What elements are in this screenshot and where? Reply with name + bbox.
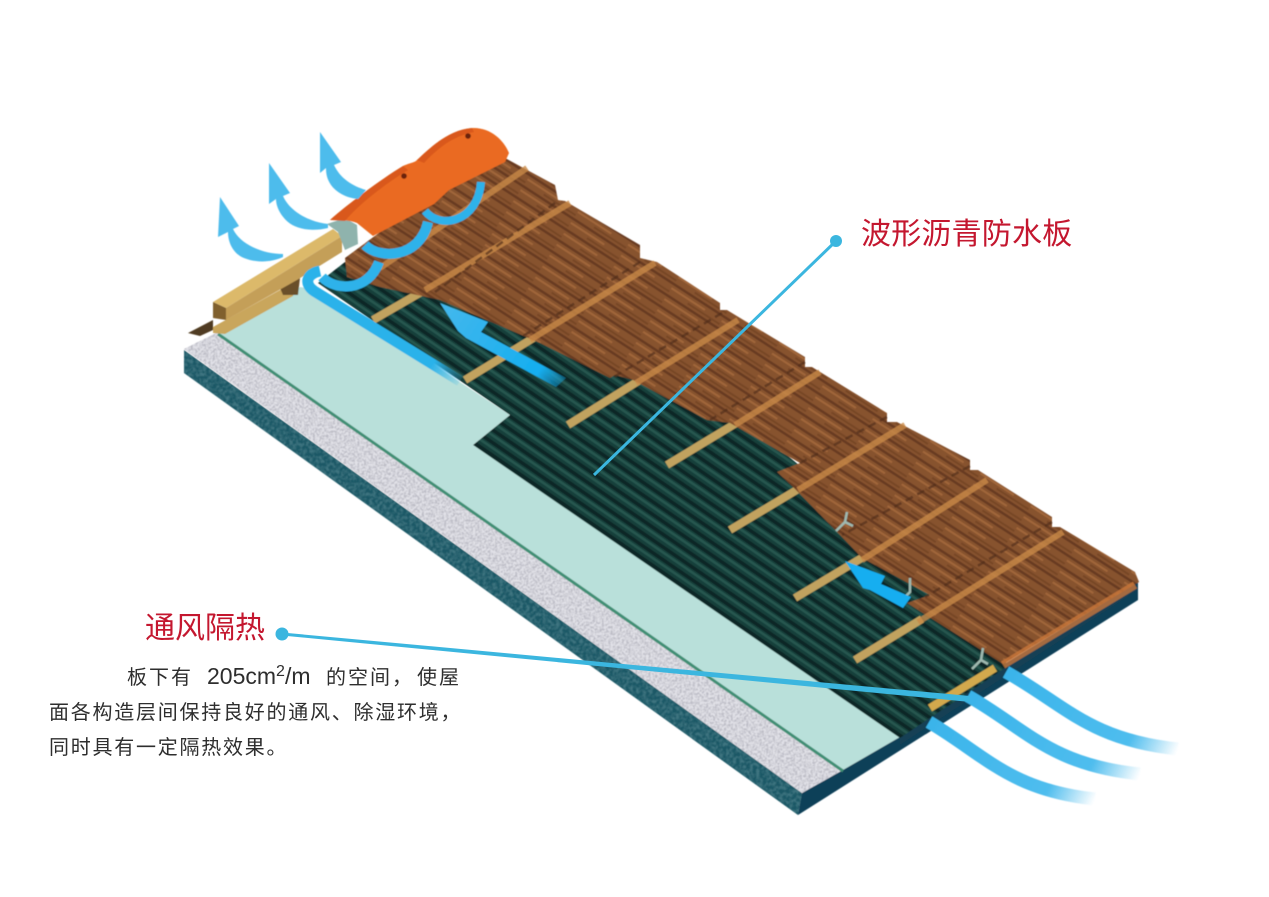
description text: 205cm (207, 663, 276, 689)
tile overlap shadow lines (435, 203, 1052, 597)
description text: 2 (276, 663, 285, 680)
blue flow arrow upper (440, 303, 566, 387)
callout: corrugated board leader line (594, 235, 842, 475)
description text: 板下有 (127, 666, 193, 689)
batten strips on board (373, 287, 995, 708)
blue inlet airflow ribbons (929, 672, 1178, 799)
metal clips (836, 512, 988, 669)
blue flow arrow lower (845, 561, 911, 608)
blue airflow strip along eaves (308, 271, 460, 381)
description text: 使屋 (417, 666, 461, 689)
description text: /m (285, 663, 311, 689)
dark slab end behind sheet (900, 582, 1138, 745)
membrane green edge (218, 334, 843, 771)
slab front edge (798, 586, 1138, 815)
waterproof membrane layer (218, 287, 900, 770)
description text: 同时具有一定隔热效果。 (49, 736, 288, 759)
ridge support block (327, 218, 358, 250)
corrugated asphalt waterproof board (318, 262, 1010, 738)
brown roof tiles (345, 158, 1139, 664)
slab side edge (184, 350, 802, 815)
wooden ridge batten (188, 229, 342, 336)
description text: 面各构造层间保持良好的通风、除湿环境， (49, 701, 462, 724)
description text: 的空间， (326, 666, 414, 689)
description text (49, 663, 462, 759)
orange ridge cap (330, 128, 509, 236)
heading: ventilation and heat insulation: 通风隔热 (145, 612, 265, 645)
roof section diagram (184, 128, 1178, 815)
orange battens over tiles (380, 168, 1135, 665)
callout: ventilation leader line (276, 628, 970, 702)
heading: corrugated asphalt board: 波形沥青防水板 (861, 218, 1072, 251)
insulation layer (184, 332, 843, 793)
blue airflow curls under tiles (322, 182, 481, 286)
blue upward exhaust arrows (218, 132, 366, 261)
